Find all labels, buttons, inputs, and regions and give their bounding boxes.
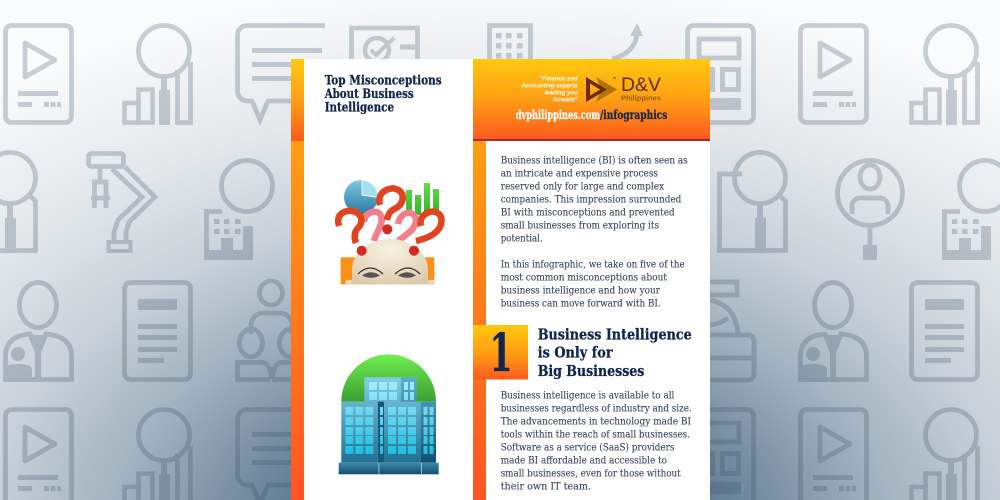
intro text: business intelligence and how your <box>501 285 661 297</box>
intro text: small businesses from exploring its <box>501 220 659 232</box>
section text: their own IT team. <box>501 481 591 493</box>
icon: question mark dots <box>357 224 419 256</box>
intro text: reserved only for large and complex <box>501 180 664 192</box>
title: Top Misconceptions <box>325 73 442 88</box>
logo: Philippines <box>621 94 661 103</box>
section heading: Big Businesses <box>538 362 644 380</box>
tagline <box>521 77 578 104</box>
windows <box>345 382 434 454</box>
section text: made BI affordable and accessible to <box>501 455 667 467</box>
number badge 1: 1 <box>490 323 512 384</box>
icon: red question marks <box>338 188 442 243</box>
intro text: potential. <box>501 232 543 244</box>
logo <box>586 75 661 103</box>
infographic page <box>291 59 710 500</box>
intro text <box>501 154 688 310</box>
header banner <box>473 59 710 141</box>
title <box>324 73 442 116</box>
intro text: companies. This impression surrounded <box>501 194 682 206</box>
section heading: Business Intelligence <box>538 325 692 343</box>
intro text: BI with misconceptions and prevented <box>501 206 675 218</box>
intro text: an intricate and expensive process <box>501 168 658 180</box>
number badge 1 <box>473 323 528 384</box>
tagline: Accounting experts <box>521 84 578 90</box>
icon: pie chart <box>344 180 378 214</box>
intro text: most common misconceptions about <box>501 272 668 284</box>
tagline: forward" <box>553 98 578 104</box>
section text: Business intelligence is available to all <box>501 389 675 401</box>
icon: office buildings <box>339 354 439 474</box>
section text: small businesses, even for those without <box>501 468 681 480</box>
section text: The advancements in technology made BI <box>501 415 691 427</box>
intro text: Business intelligence (BI) is often seen as <box>501 154 688 166</box>
icon: green bars <box>406 183 439 215</box>
icon: pink question marks <box>364 212 416 241</box>
intro text: business can move forward with BI. <box>501 298 661 310</box>
building base <box>339 463 439 474</box>
icon: head with question marks <box>338 180 442 284</box>
section heading: is Only for <box>538 344 614 362</box>
section text: Software as a service (SaaS) providers <box>501 442 674 454</box>
title: Intelligence <box>325 101 394 116</box>
title: About Business <box>324 87 414 102</box>
intro text: In this infographic, we take on five of the <box>501 259 685 271</box>
section heading <box>538 325 692 380</box>
logo: D&V <box>621 75 661 96</box>
section text: businesses regardless of industry and size. <box>501 402 692 414</box>
section text: tools within the reach of small businesses. <box>501 428 690 440</box>
url: dvphilippines.com <box>516 108 600 122</box>
url: /infographics <box>600 108 667 122</box>
section text <box>501 389 692 493</box>
tagline: "Finance and <box>540 77 578 83</box>
tagline: leading you <box>544 91 578 97</box>
icon: bald head <box>345 239 435 284</box>
